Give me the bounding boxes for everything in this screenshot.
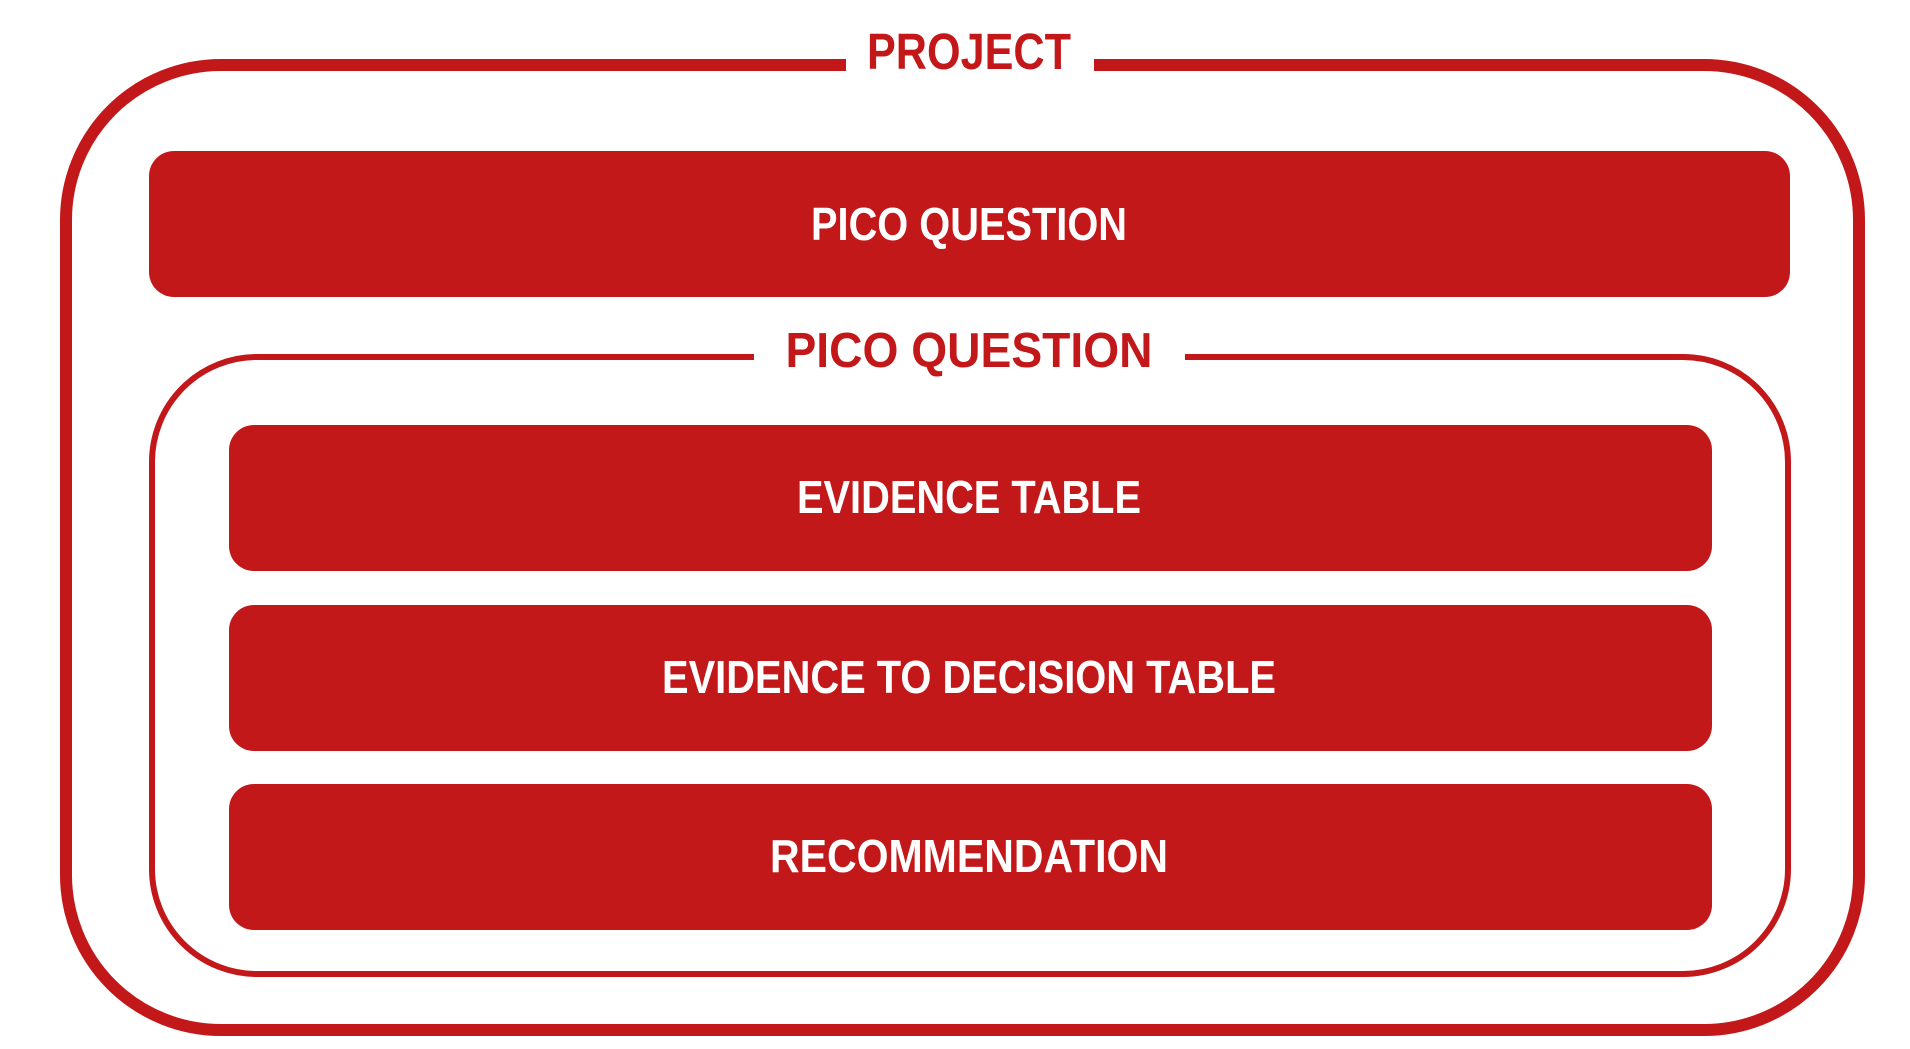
panel: PICO question inner frame	[152, 357, 1788, 974]
box: recommendation: RECOMMENDATION	[770, 830, 1168, 882]
title: PROJECT: PROJECT	[867, 23, 1071, 80]
box: PICO question	[149, 151, 1790, 297]
box: evidence table	[229, 425, 1712, 571]
box: evidence to decision table: EVIDENCE TO DECISION TABLE	[662, 651, 1276, 703]
box: recommendation	[229, 784, 1712, 930]
box: PICO question: PICO QUESTION	[811, 198, 1127, 250]
box: evidence table: EVIDENCE TABLE	[797, 471, 1141, 523]
heading: PICO QUESTION: PICO QUESTION	[786, 324, 1152, 378]
box: evidence to decision table	[229, 605, 1712, 751]
